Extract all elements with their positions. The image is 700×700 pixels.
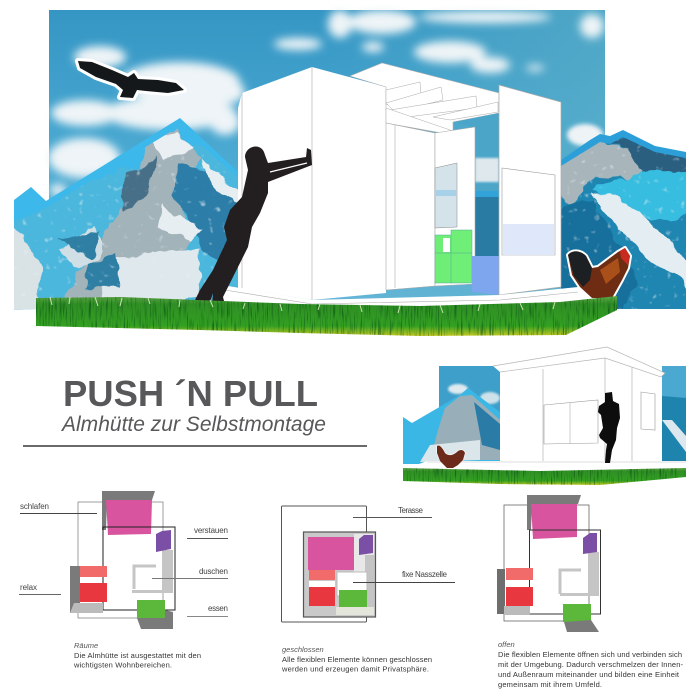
caption: Räume bbox=[74, 641, 98, 650]
caption: werden und erzeugen damit Privatsphäre. bbox=[281, 664, 429, 674]
labels bbox=[353, 506, 455, 583]
sky with clouds bbox=[48, 10, 605, 310]
labels: essen bbox=[208, 604, 228, 613]
labels: duschen bbox=[199, 567, 228, 576]
labels bbox=[19, 502, 228, 617]
caption bbox=[73, 641, 201, 670]
icon: rooster bbox=[568, 248, 630, 298]
caption: Alle flexiblen Elemente können geschlossen bbox=[282, 655, 432, 664]
plan drawing bbox=[497, 495, 600, 632]
plan: offen bbox=[497, 495, 684, 689]
labels: schlafen bbox=[20, 502, 49, 511]
hero illustration: alpine hut scene bbox=[0, 10, 700, 336]
background sky and mountains bbox=[403, 366, 686, 464]
grass strip bbox=[403, 468, 686, 485]
hut drawing bbox=[403, 347, 686, 470]
caption: und Außenraum miteinander und bilden eine Einheit bbox=[498, 670, 680, 679]
caption: offen bbox=[498, 640, 515, 649]
labels: Terasse bbox=[398, 506, 424, 515]
left mountain bbox=[14, 118, 238, 310]
labels: verstauen bbox=[194, 526, 228, 535]
subtitle: Almhütte zur Selbstmontage bbox=[60, 413, 326, 436]
plan drawing bbox=[282, 506, 376, 622]
plan drawing bbox=[70, 491, 175, 629]
right mountain bbox=[561, 130, 686, 309]
plan: Räume bbox=[19, 491, 228, 670]
icon: eagle bbox=[78, 61, 184, 98]
caption: mit der Umgebung. Dadurch verschmelzen der Innen- bbox=[498, 660, 684, 669]
caption: Die flexiblen Elemente öffnen sich und verbinden sich bbox=[498, 650, 682, 659]
caption bbox=[498, 640, 684, 689]
caption bbox=[281, 645, 432, 674]
heading: PUSH ´N PULL bbox=[63, 373, 318, 414]
caption: gemeinsam mit ihrem Umfeld. bbox=[498, 680, 602, 689]
plan: geschlossen bbox=[281, 506, 455, 674]
secondary view: hut from behind bbox=[403, 347, 686, 485]
labels: relax bbox=[20, 583, 37, 592]
caption: geschlossen bbox=[282, 645, 324, 654]
icon: woman silhouette pushing bbox=[195, 146, 312, 305]
icon: man silhouette bbox=[598, 392, 620, 463]
labels: fixe Nasszelle bbox=[402, 570, 448, 579]
caption: Die Almhütte ist ausgestattet mit den bbox=[74, 651, 201, 660]
caption: wichtigsten Wohnbereichen. bbox=[73, 660, 172, 670]
building: main white hut bbox=[222, 63, 592, 308]
grass ground bbox=[36, 296, 617, 336]
title block bbox=[23, 373, 367, 447]
icon: hen bbox=[437, 446, 465, 468]
